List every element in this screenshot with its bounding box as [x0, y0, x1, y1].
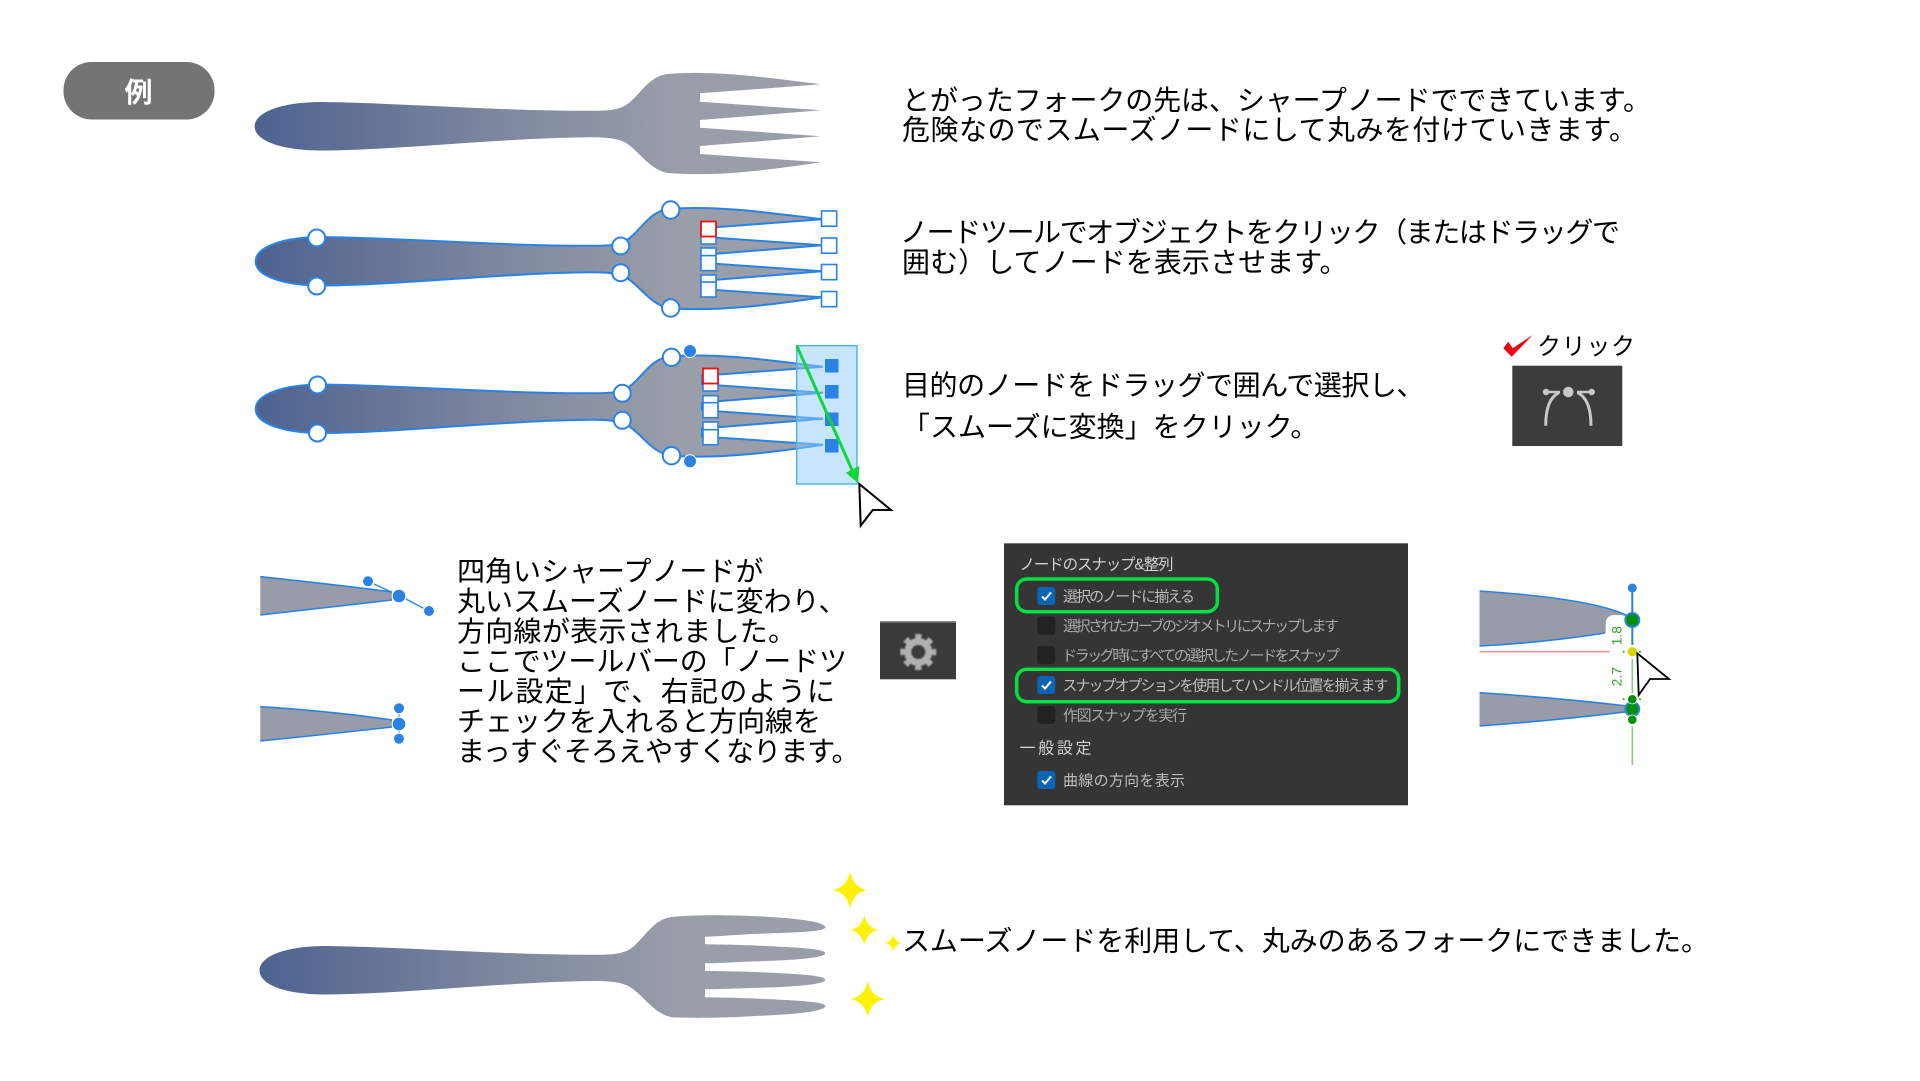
panel: node snap and align settings — [1004, 543, 1408, 805]
fork: sharp original — [255, 73, 821, 174]
text: step 4 description — [457, 556, 860, 767]
text: step 3 description: 目的のノードをドラッグで囲んで選択し、 — [902, 370, 1424, 401]
icon: cursor — [1637, 653, 1669, 695]
highlight: first option — [1017, 579, 1217, 612]
text: step 4 description: チェックを入れると方向線を — [457, 706, 821, 737]
icon: convert to smooth button — [1512, 366, 1622, 446]
highlight: handle option — [1017, 669, 1399, 702]
row: align to selected node: 選択のノードに揃える — [1063, 588, 1195, 606]
fork: tip nodes selected by drag — [256, 344, 891, 526]
fork: nodes displayed — [256, 201, 837, 317]
text: step 1 description: とがったフォークの先は、シャープノードでできています。 — [902, 85, 1651, 116]
row: align handle positions: スナップオプションを使用してハンドル位置を揃えます — [1062, 678, 1388, 694]
text: step 1 description: 危険なのでスムーズノードにして丸みを付けていきます。 — [902, 114, 1637, 146]
icon: gear settings button — [880, 621, 956, 679]
text: step 1 description — [902, 85, 1651, 146]
text: step 3 description — [902, 370, 1424, 442]
arrow: drag direction — [797, 346, 859, 483]
heading: general settings: 一般設定 — [1020, 740, 1092, 758]
text: step 2 description: ノードツールでオブジェクトをクリック（またはドラッグで — [900, 217, 1620, 248]
badge: 例 — [64, 62, 214, 120]
icon: sparkles — [833, 872, 902, 1017]
text: step 4 description: 方向線が表示されました。 — [457, 616, 796, 647]
text: step 4 description: ール設定」で、右記のように — [457, 676, 835, 707]
tine: smooth node with straight handles — [260, 703, 406, 744]
label: 1.8: 1.8 — [1608, 626, 1624, 645]
text: step 2 description: 囲む）してノードを表示させます。 — [902, 247, 1348, 278]
badge: 例: 例 — [124, 77, 153, 108]
text: step 2 description — [900, 217, 1620, 278]
fork: rounded result — [260, 915, 825, 1018]
row: snap to curve geometry: 選択されたカーブのジオメトリにスナップします — [1063, 617, 1339, 635]
text: step 3 description: 「スムーズに変換」をクリック。 — [902, 412, 1318, 442]
selection rectangle — [797, 346, 857, 484]
diagram: handle alignment with snap guides — [1480, 584, 1669, 765]
row: construction snap: 作図スナップを実行 — [1063, 708, 1187, 724]
text: step 4 description: 丸いスムーズノードに変わり、 — [457, 586, 846, 617]
heading: node snap: ノードのスナップ&整列 — [1020, 556, 1174, 574]
text: result description: スムーズノードを利用して、丸みのあるフォークにできました。 — [902, 926, 1709, 956]
tine: smooth node with skewed handles — [260, 576, 434, 616]
row: show curve direction: 曲線の方向を表示 — [1063, 772, 1185, 790]
text: step 4 description: 四角いシャープノードが — [457, 556, 763, 587]
click label with check mark: クリック — [1537, 334, 1635, 360]
icon: cursor — [859, 484, 891, 526]
text: step 4 description: まっすぐそろえやすくなります。 — [457, 736, 860, 767]
text: step 4 description: ここでツールバーの「ノードツ — [457, 646, 847, 677]
label: 2.7: 2.7 — [1608, 667, 1624, 686]
row: snap all selected nodes on drag: ドラッグ時にすべての選択したノードをスナップ — [1062, 648, 1340, 664]
